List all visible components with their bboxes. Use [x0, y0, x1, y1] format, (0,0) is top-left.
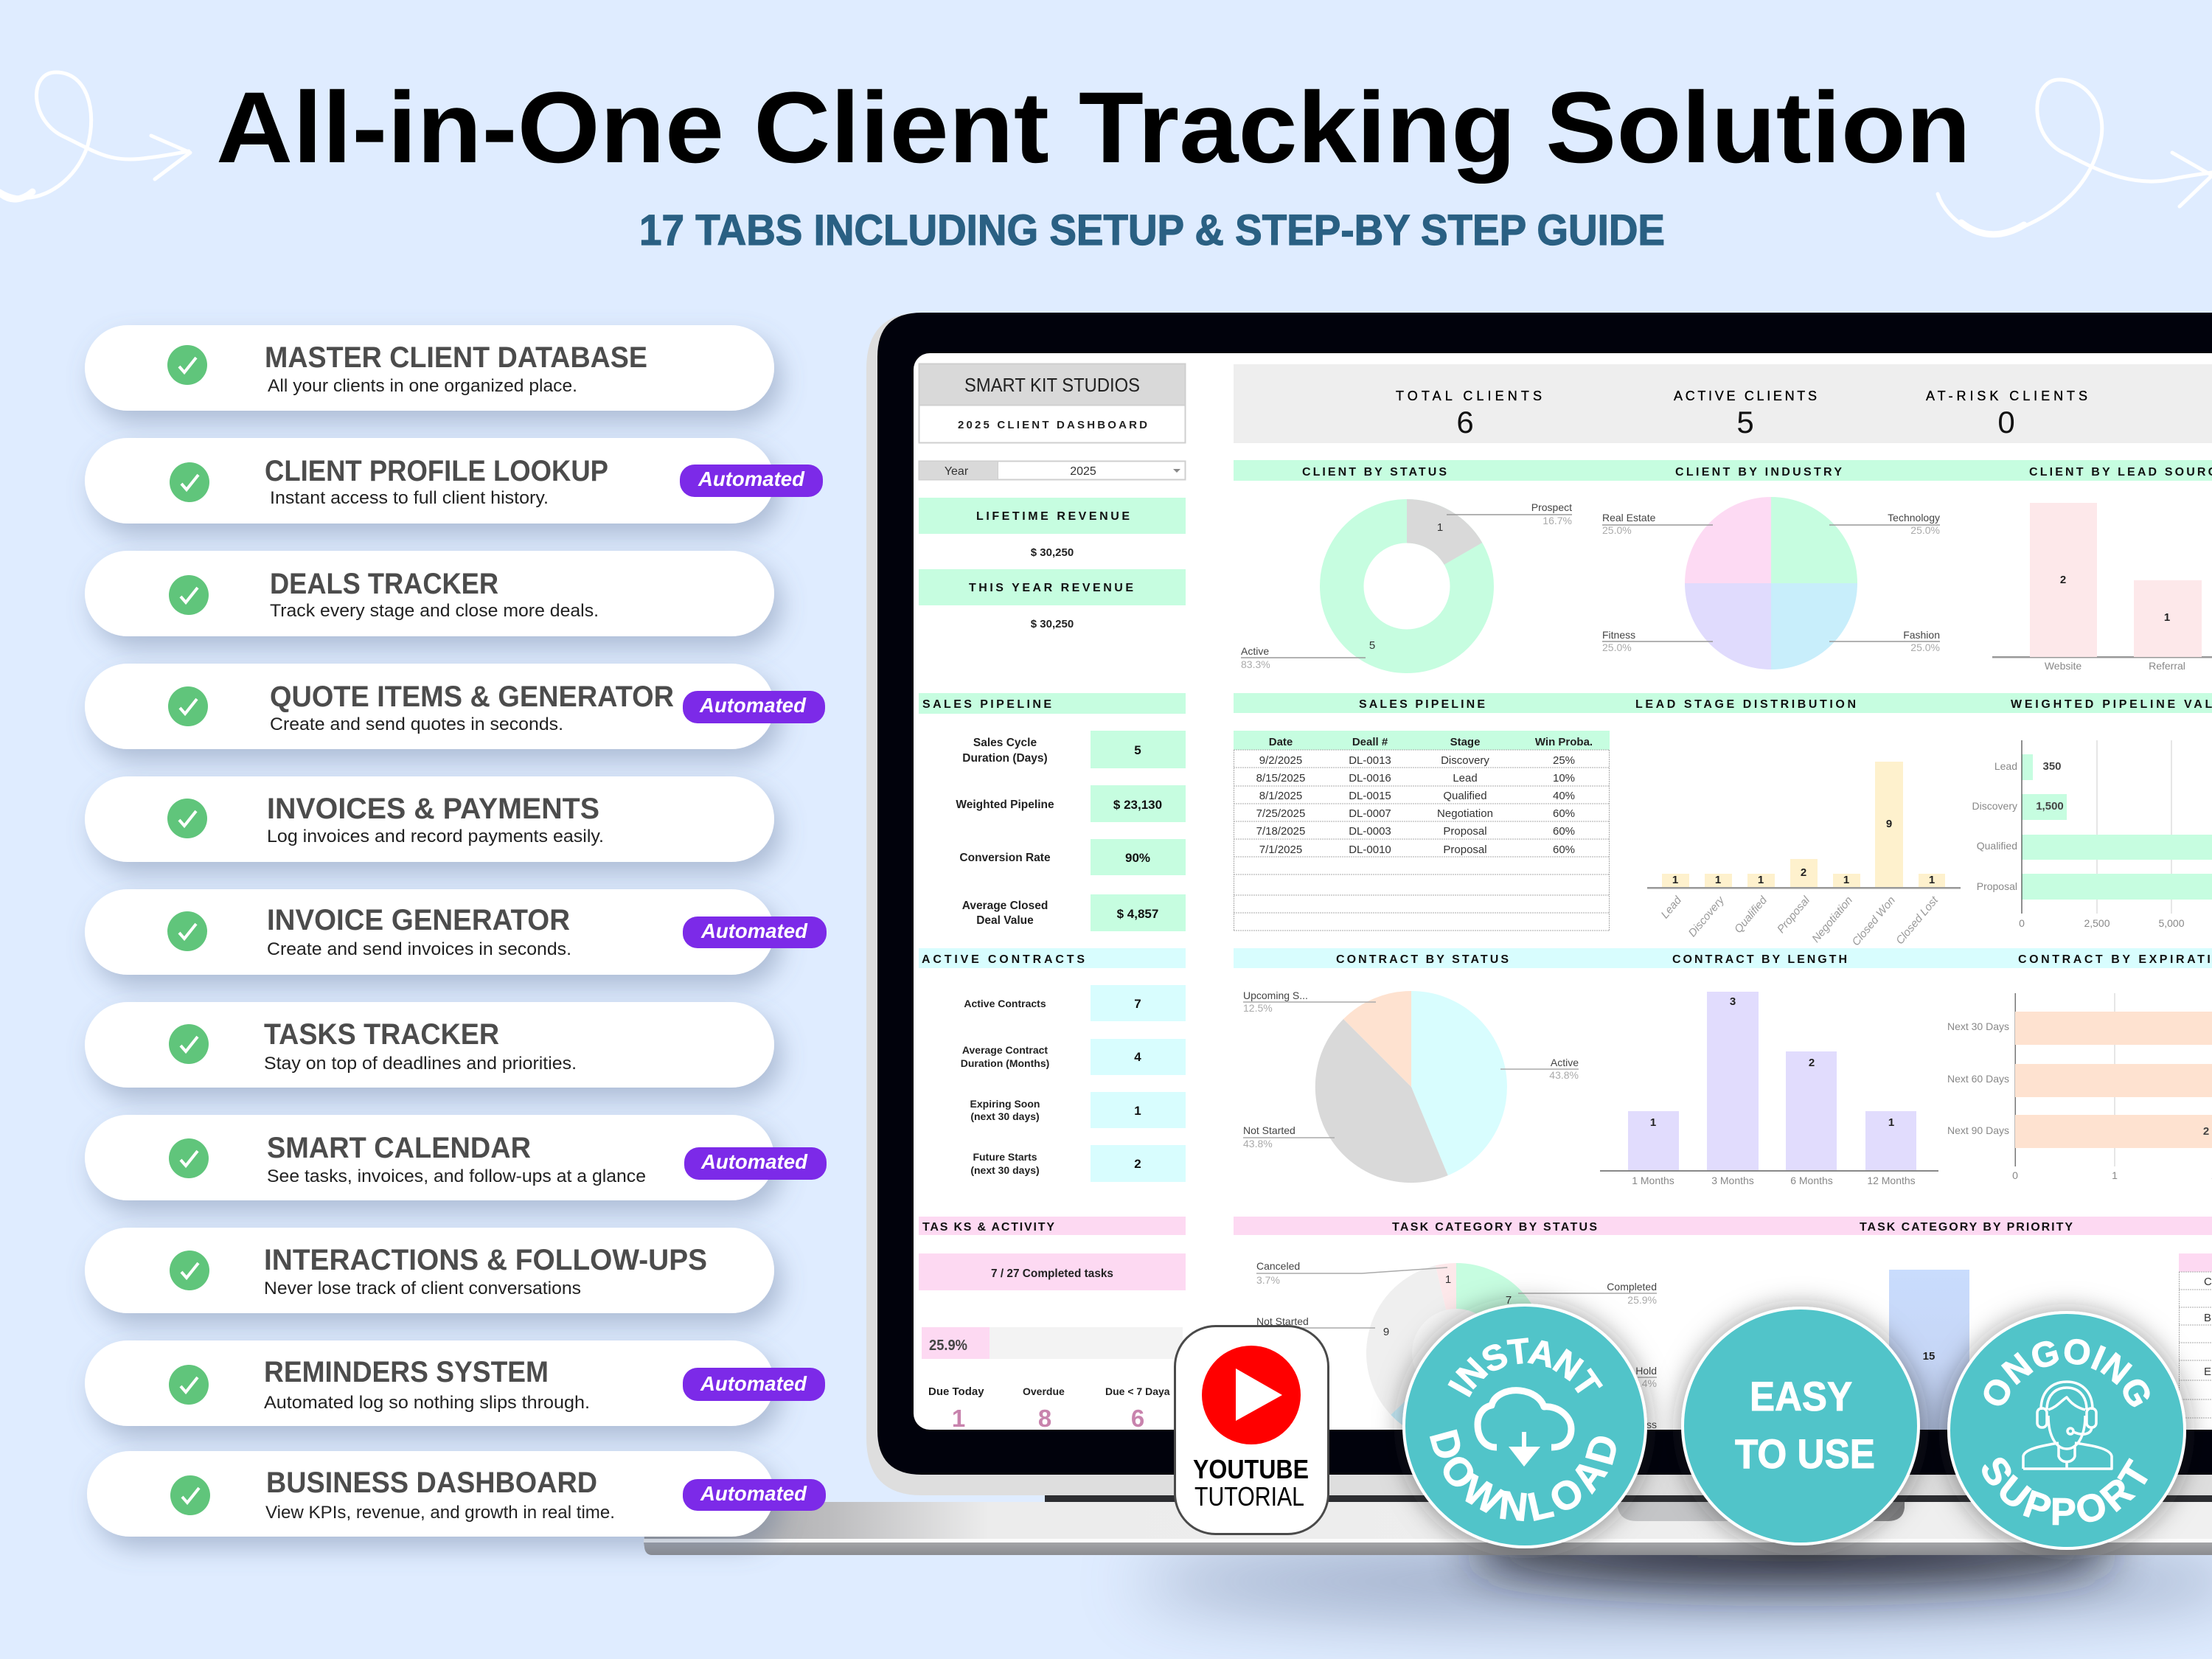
icon: check: [169, 1138, 209, 1178]
donut chart: task category by status: 7: [1506, 1294, 1512, 1307]
panel: sales pipeline KPIs: Duration (Days): [962, 752, 1048, 765]
pie chart: client by industry: Real Estate: [1602, 512, 1656, 524]
automated badge: reminders system: Automated: [700, 1372, 807, 1395]
section header: contract charts: CONTRACT BY LENGTH: [1672, 953, 1847, 966]
laptop body: [644, 313, 2212, 1555]
pie chart: client by industry: Technology: [1888, 512, 1940, 524]
feature pill 6: invoice generator: [85, 889, 774, 975]
bar chart: contract by length: 3 Months: [1711, 1175, 1754, 1186]
pie chart: contract by status: Active: [1551, 1057, 1579, 1068]
donut chart: task category by status: Not Started: [1256, 1315, 1309, 1327]
feature pill 7: tasks tracker: TASKS TRACKER: [264, 1018, 499, 1051]
panel: sales pipeline KPIs: Weighted Pipeline: [956, 799, 1054, 811]
feature pill 10: reminders system: [85, 1340, 774, 1426]
icon: check: [170, 462, 209, 502]
panel: sales pipeline KPIs: SALES PIPELINE: [922, 698, 1051, 711]
feature pill 8: smart calendar: SMART CALENDAR: [267, 1132, 531, 1164]
badge: instant download: INSTANT: [1447, 1338, 1603, 1397]
bar chart: contract by length: 1: [1888, 1116, 1894, 1129]
bar chart: contract by length: [1600, 992, 1938, 1186]
bar chart: contract by expiration: Next 30 Days: [1947, 1020, 2009, 1032]
youtube tutorial card: TUTORIAL: [1194, 1481, 1304, 1512]
panel: sales pipeline KPIs: 5: [1134, 743, 1141, 757]
icon: youtube play: [1202, 1346, 1301, 1444]
automated badge: quote items: Automated: [699, 694, 807, 717]
feature pill 4: quote items and generator: QUOTE ITEMS & GENERATOR: [270, 681, 674, 713]
bar chart: lead stage distribution: Qualified: [1732, 894, 1770, 936]
year selector: 2025: [1070, 465, 1096, 478]
bar chart: client by lead source: 1: [2164, 611, 2170, 624]
feature pill 10: reminders system: Automated log so nothing slips through.: [264, 1393, 590, 1413]
hinge bar: [1045, 1495, 2212, 1502]
table: sales pipeline deals: Stage: [1450, 736, 1480, 748]
donut chart: task category by status: 7.4%: [1633, 1377, 1657, 1389]
feature pill 11: business dashboard: View KPIs, revenue, and growth in real time.: [265, 1503, 615, 1523]
panel: active contracts KPIs: (next 30 days): [970, 1164, 1040, 1176]
table: sales pipeline deals: 25%: [1553, 754, 1575, 767]
section header: client charts: [1234, 460, 2212, 481]
badge: easy to use: [1681, 1307, 1920, 1545]
bar chart: lead stage distribution: 1: [1843, 874, 1849, 886]
automated badge: invoice generator: Automated: [700, 919, 808, 942]
bar chart: lead stage distribution: 2: [1801, 866, 1806, 879]
bar chart: lead stage distribution: Closed Lost: [1893, 894, 1941, 947]
table: sales pipeline deals: Proposal: [1443, 825, 1487, 838]
table: sales pipeline deals: Discovery: [1441, 754, 1489, 767]
table: sales pipeline deals: Lead: [1453, 772, 1478, 785]
donut chart: task category by status: Completed: [1607, 1281, 1657, 1293]
youtube tutorial card: [1175, 1326, 1329, 1534]
panel: sales pipeline KPIs: $ 23,130: [1113, 798, 1162, 812]
bar chart: contract by expiration: Next 60 Days: [1947, 1073, 2009, 1085]
table: sales pipeline deals: DL-0010: [1349, 844, 1391, 856]
feature pill 7: tasks tracker: [85, 1002, 774, 1088]
feature pill 4: quote items and generator: Create and send quotes in seconds.: [270, 714, 563, 734]
section header: task charts: TASK CATEGORY BY PRIORITY: [1860, 1221, 2073, 1234]
feature pill 1: master client database: MASTER CLIENT DATABASE: [265, 341, 647, 374]
panel: active contracts KPIs: Future Starts: [973, 1151, 1037, 1163]
laptop shadow: [1135, 1523, 2212, 1620]
section header: contract charts: CONTRACT BY STATUS: [1336, 953, 1509, 966]
pie chart: contract by status: 43.8%: [1549, 1069, 1579, 1081]
donut chart: client by status: Prospect: [1531, 501, 1572, 513]
table: sales pipeline deals: 10%: [1553, 772, 1575, 785]
icon: check: [169, 1024, 209, 1064]
section header: pipeline charts: [1234, 693, 2212, 713]
automated badge: smart calendar: Automated: [700, 1150, 808, 1173]
KPI band: client counts: 6: [1456, 405, 1474, 439]
feature pill 7: tasks tracker: Stay on top of deadlines and priorities.: [264, 1054, 577, 1074]
feature pill 6: invoice generator: INVOICE GENERATOR: [267, 904, 570, 936]
table: sales pipeline deals: [1234, 731, 1610, 931]
donut chart: task category by status: 9: [1383, 1326, 1389, 1338]
bar chart: client by lead source: Referral: [2149, 660, 2185, 672]
table: sales pipeline deals: Win Proba.: [1535, 736, 1593, 748]
icon: check: [170, 1475, 210, 1515]
bar chart: lead stage distribution: Proposal: [1775, 894, 1812, 936]
panel: sales pipeline KPIs: Average Closed: [962, 900, 1048, 912]
pie chart: contract by status: Not Started: [1243, 1124, 1295, 1136]
panel: tasks and activity: Due Today: [928, 1385, 984, 1398]
panel: active contracts KPIs: 7: [1134, 997, 1141, 1011]
bar chart: contract by expiration: Next 90 Days: [1947, 1124, 2009, 1136]
section header: client charts: CLIENT BY INDUSTRY: [1675, 466, 1842, 479]
table: sales pipeline deals: 7/1/2025: [1259, 844, 1302, 856]
bar chart: lead stage distribution: 9: [1886, 818, 1892, 830]
subtitle: 17 TABS INCLUDING SETUP & STEP-BY STEP GUIDE: [639, 206, 1665, 254]
donut chart: client by status: [1241, 499, 1572, 670]
bar chart: contract by length: 3: [1730, 995, 1736, 1008]
table: sales pipeline deals: DL-0015: [1349, 790, 1391, 802]
table: sales pipeline deals: DL-0016: [1349, 772, 1391, 785]
panel: active contracts KPIs: Expiring Soon: [970, 1098, 1040, 1110]
donut chart: client by status: 83.3%: [1241, 658, 1270, 670]
panel: active contracts KPIs: ACTIVE CONTRACTS: [922, 953, 1085, 966]
pie chart: client by industry: Fashion: [1903, 629, 1940, 641]
feature pill 5: invoices and payments: Log invoices and record payments easily.: [267, 827, 604, 846]
table: sales pipeline deals: DL-0007: [1349, 807, 1391, 820]
section header: task charts: [1234, 1217, 2212, 1235]
badge: ongoing support: SUPPORT: [1982, 1457, 2148, 1525]
badge: easy to use: TO USE: [1735, 1430, 1875, 1477]
panel: active contracts KPIs: 1: [1134, 1104, 1141, 1118]
panel: tasks and activity: Overdue: [1023, 1385, 1065, 1397]
donut chart: task category by status: Canceled: [1256, 1260, 1300, 1272]
panel: sales pipeline KPIs: Conversion Rate: [959, 852, 1051, 864]
youtube tutorial card: YOUTUBE: [1193, 1454, 1309, 1484]
year selector: [919, 462, 1186, 479]
pie chart: client by industry: 25.0%: [1602, 641, 1632, 653]
title: All-in-One Client Tracking Solution: [216, 72, 1971, 184]
table: sales pipeline deals: Date: [1269, 736, 1293, 748]
feature pill 5: invoices and payments: INVOICES & PAYMENTS: [267, 793, 599, 825]
pie chart: contract by status: [1243, 990, 1579, 1183]
badge: easy to use: EASY: [1750, 1373, 1852, 1419]
panel: tasks and activity: 1: [952, 1405, 965, 1432]
bar chart: task category by priority: [1889, 1270, 1969, 1430]
KPI band: client counts: 0: [1997, 405, 2015, 439]
feature pill 4: quote items and generator: [85, 664, 774, 749]
feature pill 9: interactions and follow-ups: INTERACTIONS & FOLLOW-UPS: [264, 1244, 707, 1276]
icon: check: [169, 575, 209, 615]
bar chart: client by lead source: Website: [2045, 660, 2081, 672]
panel: sales pipeline KPIs: [919, 693, 1186, 931]
automated badge: business dashboard: Automated: [700, 1482, 807, 1505]
pie chart: client by industry: 25.0%: [1910, 524, 1940, 536]
donut chart: task category by status: 33.3%: [1256, 1329, 1286, 1340]
bar chart: weighted pipeline value: 350: [2042, 760, 2062, 773]
icon: check: [167, 345, 207, 385]
panel: tasks and activity: 7 / 27 Completed tasks: [991, 1267, 1113, 1280]
feature pill 10: reminders system: REMINDERS SYSTEM: [264, 1356, 549, 1388]
panel: active contracts KPIs: 4: [1134, 1050, 1141, 1064]
badge: ongoing support: ONGOING: [1983, 1339, 2150, 1407]
panel: tasks and activity: 8: [1038, 1405, 1051, 1432]
donut chart: task category by status: [1256, 1260, 1657, 1443]
section header: client charts: CLIENT BY STATUS: [1302, 466, 1447, 479]
feature pill 5: invoices and payments: [85, 776, 774, 862]
panel: sales pipeline KPIs: Sales Cycle: [973, 737, 1037, 749]
panel: lifetime revenue: LIFETIME REVENUE: [976, 510, 1130, 523]
table: sales pipeline deals: DL-0013: [1349, 754, 1391, 767]
automated badge: smart calendar: [684, 1147, 827, 1180]
feature pill 11: business dashboard: [87, 1451, 774, 1537]
panel: lifetime revenue: $ 30,250: [1031, 546, 1074, 559]
icon: check: [167, 799, 207, 838]
panel: active contracts KPIs: [919, 948, 1186, 1182]
bar chart: lead stage distribution: Lead: [1659, 894, 1684, 921]
feature pill 3: deals tracker: Track every stage and close more deals.: [270, 601, 599, 621]
badge: instant download: DOWNLOAD: [1429, 1429, 1616, 1522]
donut chart: task category by status: 1: [1445, 1273, 1451, 1286]
laptop lid frame: [866, 313, 2212, 1495]
feature pill 3: deals tracker: DEALS TRACKER: [270, 568, 498, 600]
bar chart: client by lead source: 2: [2060, 574, 2066, 586]
bar chart: client by lead source: [1992, 503, 2212, 672]
bar chart: lead stage distribution: 1: [1929, 874, 1935, 886]
bar chart: weighted pipeline value: 1,500: [2036, 800, 2064, 813]
icon: support agent headset: [2023, 1382, 2112, 1469]
panel: active contracts KPIs: Average Contract: [962, 1044, 1048, 1056]
panel: sales pipeline KPIs: 90%: [1125, 851, 1150, 865]
automated badge: business dashboard: [683, 1479, 826, 1511]
table: sales pipeline deals: 8/15/2025: [1256, 772, 1305, 785]
bar chart: contract by expiration: 2: [2203, 1125, 2209, 1138]
section header: contract charts: [1234, 948, 2212, 968]
bar chart: lead stage distribution: Closed Won: [1850, 894, 1898, 948]
feature pill 9: interactions and follow-ups: [85, 1228, 774, 1313]
bar chart: contract by length: 1 Months: [1632, 1175, 1674, 1186]
bar chart: lead stage distribution: 1: [1758, 874, 1764, 886]
bar chart: contract by expiration: 1: [2112, 1169, 2118, 1181]
panel: brand header: SMART KIT STUDIOS: [964, 374, 1140, 396]
table: sales pipeline deals: 8/1/2025: [1259, 790, 1302, 802]
panel: tasks and activity: 25.9%: [929, 1338, 967, 1354]
dashboard screen: [914, 353, 2212, 1443]
donut chart: client by status: Active: [1241, 645, 1269, 657]
panel: tasks and activity: Due < 7 Daya: [1105, 1385, 1170, 1397]
feature pill 2: client profile lookup: CLIENT PROFILE LOOKUP: [265, 455, 608, 487]
panel: this year revenue: $ 30,250: [1031, 618, 1074, 630]
bar chart: contract by expiration: [1947, 993, 2212, 1181]
bar chart: contract by length: 6 Months: [1790, 1175, 1833, 1186]
feature pill 8: smart calendar: [85, 1115, 774, 1200]
donut chart: task category by status: 25.9%: [1627, 1294, 1657, 1306]
panel: this year revenue: [919, 569, 1186, 630]
panel: active contracts KPIs: Duration (Months): [961, 1057, 1049, 1069]
donut chart: task category by status: On Hold: [1619, 1365, 1657, 1377]
panel: active contracts KPIs: (next 30 days): [970, 1110, 1040, 1122]
KPI band: client counts: TOTAL CLIENTS: [1396, 389, 1542, 403]
bar chart: contract by expiration: 0: [2012, 1169, 2018, 1181]
table: sales pipeline deals: 60%: [1553, 807, 1575, 820]
pie chart: client by industry: [1602, 497, 1940, 669]
icon: check: [167, 911, 207, 951]
panel: brand header: [919, 364, 1186, 442]
section header: task charts: TASK CATEGORY BY STATUS: [1392, 1221, 1597, 1234]
feature pill 6: invoice generator: Create and send invoices in seconds.: [267, 939, 571, 959]
bar chart: weighted pipeline value: Qualified: [1977, 840, 2017, 852]
table: sales pipeline deals: Negotiation: [1437, 807, 1493, 820]
icon: cloud download: [1478, 1391, 1571, 1467]
bar chart: weighted pipeline value: Lead: [1994, 760, 2017, 772]
icon: check: [168, 686, 208, 726]
pie chart: contract by status: 43.8%: [1243, 1138, 1273, 1150]
bar chart: task category by priority: 15: [1923, 1350, 1935, 1363]
icon: check: [169, 1365, 209, 1405]
automated badge: client profile lookup: [680, 465, 823, 497]
automated badge: client profile lookup: Automated: [698, 467, 805, 490]
table: sales pipeline deals: 7/18/2025: [1256, 825, 1305, 838]
donut chart: client by status: 1: [1437, 521, 1443, 534]
automated badge: invoice generator: [683, 917, 827, 948]
panel: brand header: 2025 CLIENT DASHBOARD: [958, 419, 1147, 431]
laptop base: [644, 1502, 2212, 1555]
panel: sales pipeline KPIs: $ 4,857: [1117, 907, 1158, 921]
badge: ongoing support: [1930, 1293, 2205, 1567]
feature pill 9: interactions and follow-ups: Never lose track of client conversations: [264, 1279, 581, 1298]
section header: pipeline charts: SALES PIPELINE: [1359, 698, 1485, 711]
pie chart: client by industry: 25.0%: [1910, 641, 1940, 653]
panel: active contracts KPIs: 2: [1134, 1157, 1141, 1171]
bar chart: contract by length: 1: [1650, 1116, 1656, 1129]
bar chart: lead stage distribution: 1: [1672, 874, 1678, 886]
bar chart: lead stage distribution: Negotiation: [1809, 894, 1855, 945]
feature pill 1: master client database: [85, 325, 774, 411]
pie chart: contract by status: Upcoming S...: [1243, 990, 1308, 1001]
feature pill 11: business dashboard: BUSINESS DASHBOARD: [266, 1467, 597, 1499]
bar chart: lead stage distribution: [1647, 762, 1961, 948]
table: sales pipeline deals: Deall #: [1352, 736, 1388, 748]
panel: lifetime revenue: [919, 498, 1186, 559]
KPI band: client counts: 5: [1736, 405, 1754, 439]
bar chart: weighted pipeline value: 5,000: [2158, 917, 2185, 929]
feature pill 1: master client database: All your clients in one organized place.: [268, 376, 577, 396]
table: sales pipeline deals: 9/2/2025: [1259, 754, 1302, 767]
donut chart: task category by status: In Progress: [1604, 1419, 1657, 1430]
automated badge: quote items: [683, 691, 825, 723]
bar chart: lead stage distribution: Discovery: [1686, 894, 1728, 939]
donut chart: client by status: 5: [1369, 639, 1375, 652]
feature pill 3: deals tracker: [85, 551, 774, 636]
year selector: Year: [945, 465, 969, 478]
pie chart: client by industry: 25.0%: [1602, 524, 1632, 536]
badge: instant download: [1383, 1286, 1666, 1565]
decorative swirl arrow right: [1938, 80, 2212, 234]
bar chart: contract by length: 12 Months: [1867, 1175, 1916, 1186]
table: sales pipeline deals: 60%: [1553, 844, 1575, 856]
table: sales pipeline deals: Proposal: [1443, 844, 1487, 856]
bar chart: weighted pipeline value: Proposal: [1977, 880, 2017, 892]
automated badge: reminders system: [683, 1368, 825, 1401]
feature pill 8: smart calendar: See tasks, invoices, and follow-ups at a glance: [267, 1166, 646, 1186]
pie chart: contract by status: 12.5%: [1243, 1002, 1273, 1014]
feature pill 2: client profile lookup: [85, 438, 774, 524]
table: sales pipeline deals: 60%: [1553, 825, 1575, 838]
bar chart: contract by length: 2: [1809, 1057, 1815, 1069]
bar chart: weighted pipeline value: 2,500: [2084, 917, 2110, 929]
decorative swirl arrow left: [0, 72, 190, 199]
table: tasks list: [2179, 1253, 2212, 1418]
donut chart: task category by status: 3.7%: [1256, 1274, 1280, 1286]
panel: tasks and activity: TAS KS & ACTIVITY: [922, 1221, 1054, 1234]
feature pill 2: client profile lookup: Instant access to full client history.: [270, 488, 549, 508]
table: sales pipeline deals: DL-0003: [1349, 825, 1391, 838]
section header: pipeline charts: LEAD STAGE DISTRIBUTION: [1635, 698, 1856, 711]
laptop bezel: [877, 313, 2212, 1475]
panel: tasks and activity: [919, 1217, 1186, 1432]
panel: tasks and activity: 6: [1131, 1405, 1144, 1432]
donut chart: client by status: 16.7%: [1543, 515, 1572, 526]
pie chart: client by industry: Fitness: [1602, 629, 1635, 641]
panel: sales pipeline KPIs: Deal Value: [976, 914, 1034, 927]
bar chart: lead stage distribution: 1: [1715, 874, 1721, 886]
KPI band: client counts: ACTIVE CLIENTS: [1674, 389, 1817, 403]
KPI band: client counts: AT-RISK CLIENTS: [1926, 389, 2087, 403]
table: sales pipeline deals: 40%: [1553, 790, 1575, 802]
panel: active contracts KPIs: Active Contracts: [964, 998, 1046, 1009]
table: sales pipeline deals: Qualified: [1443, 790, 1487, 802]
table: sales pipeline deals: 7/25/2025: [1256, 807, 1305, 820]
KPI band: client counts: [1234, 364, 2212, 443]
bar chart: weighted pipeline value: Discovery: [1972, 800, 2017, 812]
panel: this year revenue: THIS YEAR REVENUE: [969, 582, 1133, 594]
icon: check: [170, 1251, 209, 1290]
bar chart: weighted pipeline value: [1972, 740, 2212, 929]
bar chart: weighted pipeline value: 0: [2019, 917, 2025, 929]
